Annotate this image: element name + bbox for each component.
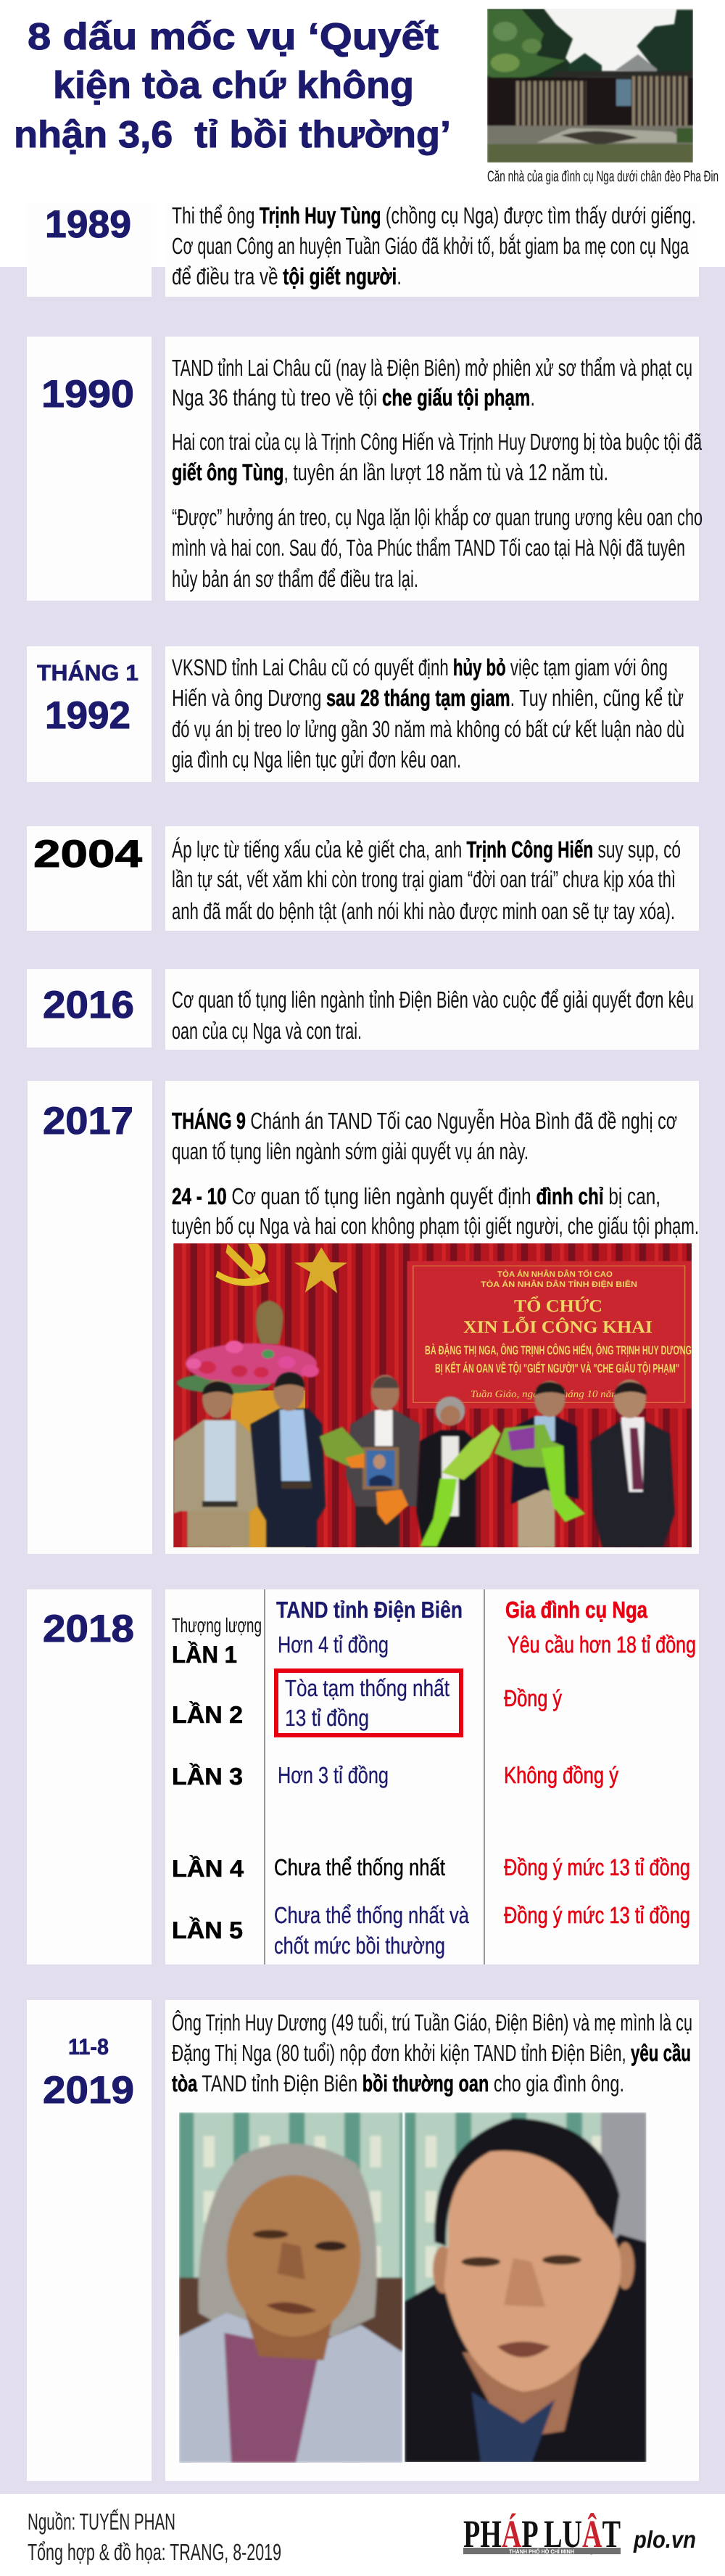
banner text: TÒA ÁN NHÂN DÂN TỈNH ĐIỆN BIÊN xyxy=(481,1280,637,1289)
year: 11-8 2019 xyxy=(43,2034,134,2112)
text: 2017 events xyxy=(172,1108,699,1239)
star xyxy=(294,1247,347,1293)
bust xyxy=(256,1301,283,1344)
text: 1992 event: gia đình cụ Nga liên tục gửi đơn kêu oan. xyxy=(172,746,461,773)
table row labels: negotiation rounds: LẦN 2 xyxy=(172,1701,243,1728)
table column: Dien Bien court: Hơn 3 tỉ đồng xyxy=(278,1762,389,1788)
banner text xyxy=(425,1270,692,1400)
table column: Dien Bien court: 13 tỉ đồng xyxy=(285,1705,369,1731)
panel: 11-8 2019 xyxy=(27,2000,699,2481)
year: 11-8 2019: 2019 xyxy=(43,2069,134,2112)
panel: January 1992 xyxy=(27,646,699,782)
person 1 xyxy=(173,1380,260,1547)
panel: 2016 xyxy=(27,969,699,1050)
photo: Mrs Dang Thi Nga xyxy=(179,2112,402,2463)
footer: source and credits: Tổng hợp & đồ họa: TRANG, 8-2019 xyxy=(28,2539,281,2565)
table row labels: negotiation rounds: LẦN 3 xyxy=(172,1763,243,1790)
person 5 xyxy=(494,1380,585,1547)
pedestal xyxy=(231,1391,305,1547)
table row labels: negotiation rounds: LẦN 4 xyxy=(172,1855,244,1882)
text: 2016 event: oan của cụ Nga và con trai. xyxy=(172,1018,362,1044)
title xyxy=(14,16,451,156)
year: THÁNG 1 1992: THÁNG 1 xyxy=(37,660,138,686)
banner text: TỔ CHỨC xyxy=(514,1296,602,1316)
text: 1992 event: VKSND tỉnh Lai Châu cũ có quyết định hủy bỏ việc tạm giam với ông xyxy=(172,654,668,680)
photo: public apology ceremony xyxy=(173,1243,692,1547)
table column: Dien Bien court: Chưa thể thống nhất và xyxy=(274,1902,469,1928)
text: 2019 event: tòa TAND tỉnh Điện Biên bồi thường oan cho gia đình ông. xyxy=(172,2070,624,2096)
panel: 1989 xyxy=(27,202,699,297)
text: 2004 event xyxy=(172,836,681,924)
panel: 2004 xyxy=(27,826,699,931)
table column: Nga family: Không đồng ý xyxy=(504,1762,618,1788)
logo: Phap Luat: THÀNH PHỐ HỒ CHÍ MINH xyxy=(509,2548,574,2555)
logo: Phap Luat: PHÁP LUẬT xyxy=(463,2512,621,2556)
logo: plo.vn: plo.vn xyxy=(633,2526,696,2553)
title: nhận 3,6 tỉ bồi thường’ xyxy=(14,114,451,156)
table column: Nga family: Gia đình cụ Nga xyxy=(505,1597,647,1623)
person 6 xyxy=(590,1380,675,1547)
year: THÁNG 1 1992: 1992 xyxy=(45,694,130,737)
table column: Nga family xyxy=(504,1597,696,1928)
table row labels: negotiation rounds: LẦN 5 xyxy=(172,1917,243,1943)
banner xyxy=(407,1261,692,1409)
table row labels: negotiation rounds: Thượng lượng xyxy=(172,1614,262,1637)
table column: Dien Bien court: Tòa tạm thống nhất xyxy=(285,1675,450,1701)
title: 8 dấu mốc vụ ‘Quyết xyxy=(28,16,439,58)
person 4: Mrs Nga xyxy=(417,1396,501,1547)
text: 2016 event xyxy=(172,987,694,1044)
hammer and sickle xyxy=(216,1244,270,1286)
photo: house at the foot of Pha Din pass xyxy=(487,9,693,163)
title: kiện tòa chứ không xyxy=(53,65,414,107)
text: 2019 event xyxy=(172,2009,692,2096)
text: 1989 event: để điều tra về tội giết người. xyxy=(172,263,402,289)
text: 1992 event xyxy=(172,654,684,773)
year: 1990: 1990 xyxy=(41,373,134,416)
text: 1989 event xyxy=(172,202,696,289)
table column: Dien Bien court xyxy=(274,1597,469,1959)
table column: Dien Bien court: Chưa thể thống nhất xyxy=(274,1854,445,1880)
highlight box: 13 billion xyxy=(276,1671,461,1735)
banner text: XIN LỖI CÔNG KHAI xyxy=(463,1317,652,1337)
year: THÁNG 1 1992 xyxy=(37,660,138,737)
year: 11-8 2019: 11-8 xyxy=(68,2034,109,2059)
year: 2016: 2016 xyxy=(43,984,134,1026)
text: 1990 events: giết ông Tùng, tuyên án lần lượt 18 năm tù và 12 năm tù. xyxy=(172,459,608,485)
flowers xyxy=(177,1341,319,1394)
year: 2017: 2017 xyxy=(43,1100,133,1143)
banner text: Tuần Giáo, ngày tháng 10 năm xyxy=(471,1389,619,1400)
year: 2018: 2018 xyxy=(43,1608,134,1650)
table column: Nga family: Đồng ý xyxy=(504,1685,562,1711)
table column: Dien Bien court: chốt mức bồi thường xyxy=(274,1933,445,1959)
panel: 2018 xyxy=(27,1589,699,1964)
banner text: TÒA ÁN NHÂN DÂN TỐI CAO xyxy=(497,1270,613,1279)
text: 2017 events: 24 - 10 Cơ quan tố tụng liên ngành quyết định đình chỉ bị can, xyxy=(172,1183,660,1209)
year: 2004: 2004 xyxy=(33,833,143,876)
text: 1990 events: Nga 36 tháng tù treo về tội che giấu tội phạm. xyxy=(172,384,535,411)
panel: 1990 xyxy=(27,337,703,601)
panel: 2017 xyxy=(28,1081,699,1554)
person 2 xyxy=(250,1373,326,1547)
footer: source and credits xyxy=(28,2509,281,2565)
footer: source and credits: Nguồn: TUYẾN PHAN xyxy=(28,2509,175,2535)
text: 2017 events: quan tố tụng liên ngành sớm giải quyết vụ án này. xyxy=(172,1138,529,1164)
text: 2004 event: Áp lực từ tiếng xấu của kẻ giết cha, anh Trịnh Công Hiến suy sụp, có xyxy=(172,836,681,863)
table row labels: negotiation rounds: LẦN 1 xyxy=(172,1641,237,1668)
table column: Dien Bien court: TAND tỉnh Điện Biên xyxy=(276,1597,463,1623)
photo: Mr Trinh Huy Duong xyxy=(405,2112,647,2463)
person 3 with portrait xyxy=(319,1375,420,1547)
table column: Dien Bien court: Hơn 4 tỉ đồng xyxy=(278,1631,389,1658)
text: 1990 events: hủy bản án sơ thẩm để điều tra lại. xyxy=(172,566,418,592)
table row labels: negotiation rounds xyxy=(172,1614,262,1943)
year: 1989: 1989 xyxy=(45,203,131,246)
text: 1990 events xyxy=(172,355,703,592)
